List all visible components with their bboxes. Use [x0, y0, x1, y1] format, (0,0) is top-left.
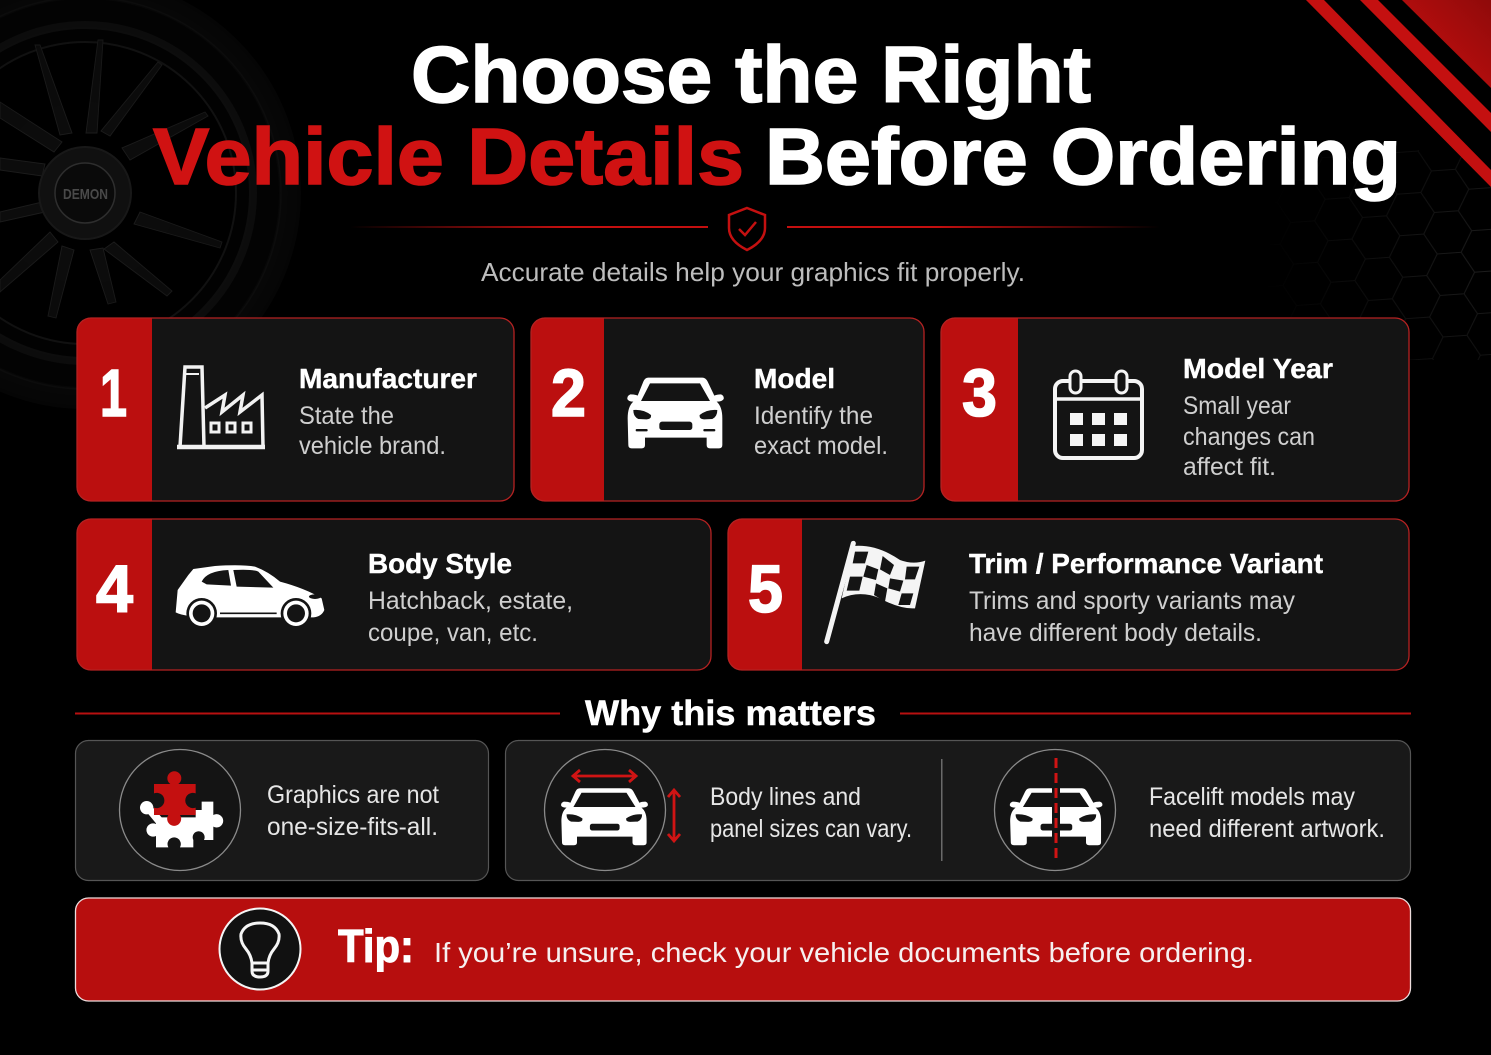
background honeycomb pattern [1329, 150, 1491, 360]
panel: 4 body style: 4 [96, 552, 133, 627]
title: Choose the Right [411, 30, 1091, 119]
icon: light bulb [241, 923, 279, 977]
subtitle: Accurate details help your graphics fit properly. [481, 257, 1025, 287]
title divider with shield icon [350, 208, 1160, 250]
panel: 4 body style: coupe, van, etc. [368, 619, 538, 647]
title: Vehicle Details [153, 112, 744, 201]
panel: 1 manufacturer [77, 318, 514, 501]
alloy wheel background image: DEMON [63, 186, 108, 203]
panel: 2 model [531, 318, 924, 501]
panel: 2 model: exact model. [754, 432, 888, 460]
panel: body lines and facelift models [506, 740, 1410, 880]
icon: hatchback side view [176, 565, 324, 629]
panel: 5 trim: Trim / Performance Variant [969, 548, 1323, 579]
panel: 3 model year: affect fit. [1183, 453, 1276, 481]
tip banner [76, 898, 1410, 1001]
panel: 2 model: Model [754, 363, 835, 394]
icon: car front [627, 378, 724, 448]
icon: car with centre line [1010, 758, 1102, 862]
heading: why this matters: Why this matters [585, 694, 876, 733]
panel: body lines and facelift models: panel sizes can vary. [710, 815, 912, 843]
panel: 3 model year [941, 318, 1409, 501]
icon: factory [177, 367, 265, 447]
title: Before Ordering [765, 112, 1401, 201]
panel: 5 trim [728, 519, 1409, 670]
panel: 3 model year: Small year [1183, 392, 1291, 420]
panel: 1 manufacturer: State the [299, 402, 394, 430]
panel: 4 body style [77, 519, 711, 670]
panel: 3 model year: Model Year [1183, 353, 1333, 384]
panel: graphics are not one-size-fits-all: one-size-fits-all. [267, 813, 438, 841]
panel: 2 model: 2 [551, 356, 586, 431]
title [153, 30, 1401, 201]
panel: 2 model: Identify the [754, 402, 873, 430]
panel: graphics are not one-size-fits-all: Graphics are not [267, 781, 439, 809]
panel: 4 body style: Body Style [368, 548, 512, 579]
panel: 1 manufacturer: 1 [100, 356, 127, 431]
panel: 5 trim: 5 [748, 552, 783, 627]
panel: 1 manufacturer: Manufacturer [299, 363, 477, 394]
panel: graphics are not one-size-fits-all [76, 740, 488, 880]
panel: 1 manufacturer: vehicle brand. [299, 432, 446, 460]
panel: 3 model year: 3 [962, 356, 997, 431]
icon: calendar [1055, 371, 1142, 458]
alloy wheel background image [0, 0, 290, 398]
icon: car with size arrows [561, 770, 680, 845]
tip banner: Tip: [338, 920, 414, 972]
tip banner: If you’re unsure, check your vehicle documents before ordering. [434, 937, 1254, 968]
panel: body lines and facelift models: Body lines and [710, 783, 861, 811]
panel: 5 trim: Trims and sporty variants may [969, 587, 1295, 615]
icon: puzzle pieces [140, 771, 223, 847]
red corner stripes [1306, 0, 1491, 187]
panel: 3 model year: changes can [1183, 423, 1315, 451]
icon: checkered flag [827, 543, 925, 642]
panel: body lines and facelift models: need different artwork. [1149, 815, 1385, 843]
panel: body lines and facelift models: Facelift models may [1149, 783, 1355, 811]
panel: 4 body style: Hatchback, estate, [368, 587, 573, 615]
panel: 5 trim: have different body details. [969, 619, 1262, 647]
